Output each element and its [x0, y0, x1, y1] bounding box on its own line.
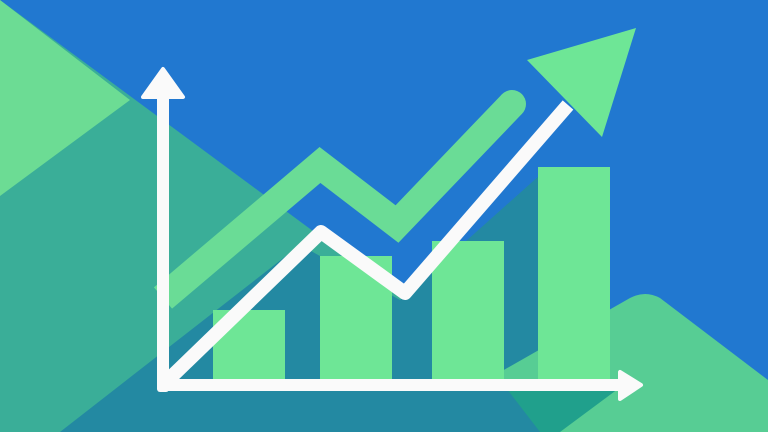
background light green triangle — [0, 0, 130, 196]
dark teal wedge under axis — [500, 380, 630, 432]
x axis — [157, 372, 641, 399]
background teal slope — [0, 0, 420, 432]
green trend band — [163, 90, 526, 298]
y axis — [143, 69, 183, 392]
background dark teal region — [60, 175, 545, 432]
background right green mountain — [495, 294, 768, 432]
green arrowhead — [527, 28, 636, 137]
white trend line — [168, 105, 568, 380]
bars — [213, 167, 610, 380]
